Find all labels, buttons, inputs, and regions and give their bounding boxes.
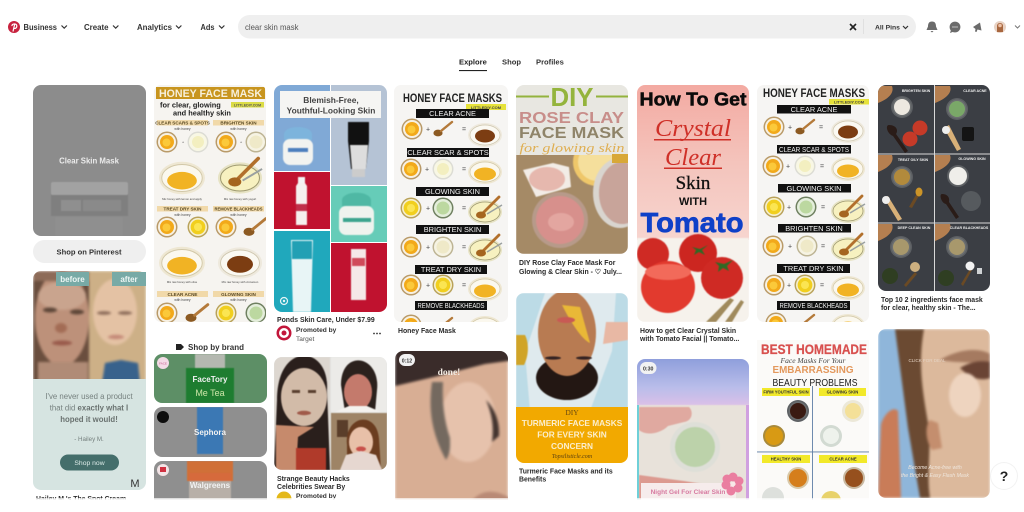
headline: FOR EVERY SKIN [537,430,607,440]
pin title: Ponds Skin Care, Under $7.99 [277,317,375,324]
row: glowing skin: = [462,206,466,212]
headline: CONCERN [551,441,593,451]
video caption: Night Gel For Clear Skin [651,489,725,496]
section: glowing skin: GLOWING SKIN [221,292,257,297]
product image [154,461,267,500]
pin title: Clear Skin Mask [59,156,120,166]
icon: chat [950,22,960,33]
section: treat dry skin [156,206,208,284]
panel: DIY rose clay mask [516,85,628,276]
section: clear scars: + [182,140,185,144]
video duration badge [399,354,415,366]
slate: treat oily skin [882,158,929,221]
pin title: with Tomato Facial || Tomato... [639,336,739,343]
row: remove blackheads [401,301,500,322]
row: clear acne: + [788,124,792,132]
video duration badge: 0:30 [643,366,654,372]
headline: DIY [516,88,628,106]
icon: flower [722,472,744,496]
row: glowing skin: + [426,206,430,212]
panel: honey face mask chart [154,85,266,324]
label: after: after [120,275,138,284]
section: treat dry skin: with honey [174,213,191,217]
pin image: mask jar [33,85,146,236]
row: remove blackheads: REMOVE BLACKHEADS [780,301,848,310]
promoted by: Promoted by [296,327,337,334]
ad caption: the Bright & Easy Flash Mask [901,473,969,479]
pin title: Strange Beauty Hacks [277,476,350,483]
site tag: LITTLEDIY.COM [834,100,865,104]
row: treat dry skin: TREAT DRY SKIN [421,265,481,274]
headline: rose clay: ROSE CLAY [519,110,624,127]
nav: Create: Create [84,23,109,32]
panel: best homemade masks [757,340,870,512]
ad headline: Youthful-Looking Skin [287,106,375,116]
panel: before and after ad [33,270,146,503]
headline: crystal: Crystal [655,116,731,142]
row: brighten skin: BRIGHTEN SKIN [785,224,843,233]
slate: treat oily skin: TREAT OILY SKIN [898,158,929,162]
video caption: done! [438,368,460,378]
video duration badge [640,362,656,374]
portrait photo [878,329,990,498]
label: after [112,272,146,286]
section: glowing skin: with honey [230,298,247,302]
row: treat dry skin: + [787,282,791,290]
pin title [639,328,739,343]
row: clear acne: CLEAR ACNE [429,109,476,118]
button: shop on pinterest [33,240,146,263]
row: glowing skin: GLOWING SKIN [786,184,842,193]
panel: honey face masks sheet one [394,85,508,340]
site tag: LITTLEDIY.COM [471,105,502,110]
slate grid [878,85,990,291]
row: brighten skin [762,224,865,261]
slate: glowing skin [941,157,986,219]
button: shop now [60,454,119,470]
icon: avatar [994,21,1006,33]
help button: ? [1000,468,1008,484]
icon: megaphone [973,22,982,32]
tabs [459,58,564,71]
help button [990,462,1018,490]
panel: turmeric face masks [516,290,628,484]
slate: clear acne: CLEAR ACNE [963,89,987,93]
sheet title: HONEY FACE MASK [159,88,262,100]
row: treat dry skin: TREAT DRY SKIN [783,264,844,273]
headline: Topsilisticle.com [552,454,593,460]
label: before: before [60,275,85,284]
row: clear acne [764,105,865,143]
slate: glowing skin: GLOWING SKIN [958,157,986,161]
button: shop now: Shop now [74,460,105,467]
pin title [519,468,613,484]
tag: glowing skin: GLOWING SKIN [827,390,858,395]
celebrity collage [274,356,387,470]
promoted by: Target [296,336,314,343]
headline: clear: Clear [665,145,722,171]
row: brighten skin: + [426,244,430,252]
section: treat dry skin: TREAT DRY SKIN [164,206,202,212]
section: brighten [213,120,266,201]
row: brighten skin [400,225,502,262]
section: brighten: Mix raw honey with yogurt [224,197,256,201]
icon: target logo [276,326,292,340]
section: remove blackheads [213,206,266,284]
row: remove blackheads [766,301,865,338]
row: brighten skin: = [821,244,825,250]
row: treat dry skin: = [820,282,824,290]
tag: clear acne [819,455,867,511]
pin title: Benefits [519,476,546,484]
headline: tomato: Tomato [640,207,744,238]
section: clear scars: with honey [174,127,191,131]
testimonial quote: that did exactly what I [50,404,128,412]
slate: brighten skin: BRIGHTEN SKIN [902,89,931,93]
poster [757,340,870,512]
row: clear scar and spots [400,148,502,184]
brand logo M: M [130,478,140,490]
panel: crystal clear skin with tomato [637,85,749,343]
icon: pinterest logo [8,21,20,33]
nav: Ads: Ads [200,23,215,32]
headline: face mask: FACE MASK [519,125,624,142]
row: clear scar and spots: + [786,164,790,170]
brand name: Sephora [194,428,227,437]
tab: Shop: Shop [502,58,521,66]
icon: account chevron [1015,26,1020,28]
pin title [881,297,983,312]
pin title: Turmeric Face Masks and its [519,468,613,476]
section: clear scars [155,120,210,201]
poster headline: BEAUTY PROBLEMS [772,378,858,389]
row: clear scar and spots: = [820,164,824,170]
row: glowing skin: GLOWING SKIN [425,187,480,196]
panel: clear skin mask shop card [33,85,146,263]
testimonial quote: I've never used a product [45,392,133,401]
row: glowing skin: + [787,204,791,212]
poster headline: EMBARRASSING [772,365,854,376]
icon: bell [926,22,938,32]
bottom fade [0,498,1000,512]
site tag [829,99,869,104]
video frame [395,351,508,500]
promoted by: Promoted by [296,493,337,500]
panel: night gel video [637,359,749,512]
slate: clear blackheads [938,226,989,286]
grid lines [757,386,870,512]
product image: Me Tea [195,388,225,398]
chart title: HONEY FACE MASKS [763,88,865,100]
row: clear scar and spots: = [462,166,466,174]
testimonial quote: hoped it would! [60,415,118,424]
button: shop on pinterest: Shop on Pinterest [57,248,122,256]
brand logo [157,464,169,476]
top navigation bar [8,15,1020,38]
panel: top ingredients slate chart [878,85,990,312]
section: clear scars: CLEAR SCARS & SPOTS [155,120,210,126]
section: clear scars: Mix honey with lemon and apply [162,197,202,201]
section: remove blackheads: REMOVE BLACKHEADS [214,206,262,212]
tag: clear acne: CLEAR ACNE [829,457,857,462]
panel: acne-free flash mask ad [878,329,990,498]
site tag: LITTLEDIY.COM [234,103,261,107]
headline [522,408,623,460]
pin image [516,85,628,254]
tag: glowing skin [819,388,866,447]
row: treat dry skin [764,264,865,300]
section: remove blackheads: with honey [230,213,247,217]
pin title [277,476,350,491]
slate: clear blackheads: CLEAR BLACKHEADS [950,226,989,230]
brand name: FaceTory [193,375,228,384]
headline: for glowing skin: for glowing skin [520,140,624,155]
brand logo [157,411,169,423]
row: clear scar and spots [762,145,865,181]
panel: eyebrow video [395,351,508,500]
faint label: CLICK FOR DEAL [908,358,946,363]
ad headline [280,91,381,118]
section: clear acne: CLEAR ACNE [168,292,197,297]
slate: deep clean skin: DEEP CLEAN SKIN [898,226,931,230]
product collage [274,85,387,312]
pin title: Hailey M.'s The Spot Cream [36,496,126,503]
nav: Business: Business [24,23,58,32]
section: clear acne [156,291,208,324]
panel: brand Sephora [154,407,267,457]
site tag [231,102,264,108]
tag: healthy skin [762,455,810,509]
headline: skin: Skin [676,173,711,194]
row: clear acne [402,109,502,147]
brand logo: FACE [159,362,167,366]
search bar [238,15,916,38]
honey masks chart [394,85,508,340]
row: treat dry skin: + [426,282,430,290]
ad caption [901,465,969,479]
panel: celebrity beauty hacks [274,356,387,506]
headline: DIY [565,408,579,417]
row: brighten skin: = [462,244,466,252]
tab: Profiles: Profiles [536,58,564,66]
row: clear scar and spots: + [425,166,429,174]
section: remove blackheads: Mix raw honey with cinnamon [222,280,259,284]
slate: brighten skin [887,89,931,153]
row: clear scar and spots: CLEAR SCAR & SPOTS [407,148,489,157]
row: glowing skin [400,187,502,224]
row: treat dry skin [400,265,502,301]
section: brighten: with honey [230,127,247,131]
poster headline: Face Masks For Your [780,356,846,365]
advertiser logo [276,492,292,506]
pin image [637,85,749,322]
tag: healthy skin: HEALTHY SKIN [771,457,801,462]
pin title: for clear, healthy skin - The... [881,305,976,312]
poster headline: BEST HOMEMADE [761,342,867,357]
nav: Analytics: Analytics [137,23,173,32]
row: remove blackheads: REMOVE BLACKHEADS [418,301,485,310]
panel: brand Walgreens [154,461,267,500]
poster headline [761,342,867,389]
sheet subtitle: for clear, glowing [160,100,221,110]
pin title: Top 10 2 ingredients face mask [881,297,983,304]
search bar: All Pins [875,25,900,32]
nav: Ads [200,23,224,32]
row: treat dry skin: = [462,282,466,290]
honey masks chart [757,85,869,338]
row: clear acne: = [819,124,823,132]
more menu [373,333,381,334]
headline: how to get: How To Get [640,90,746,110]
pin title [519,260,622,276]
section: brighten: + [240,140,243,144]
pin title: How to get Clear Crystal Skin [640,328,736,335]
product image [154,407,267,457]
video duration badge: 0:12 [402,358,412,364]
label: before [56,272,89,286]
row: clear acne: CLEAR ACNE [791,105,837,114]
pin image [516,290,628,463]
heading: shop by brand: Shop by brand [188,343,244,352]
chart title: HONEY FACE MASKS [403,93,502,105]
tab: Explore: Explore [459,58,487,66]
pin title: DIY Rose Clay Face Mask For [519,260,616,267]
panel: honey face masks sheet two [757,85,869,338]
honey mask sheet [154,85,266,324]
section: brighten: BRIGHTEN SKIN [220,120,257,126]
tag: firm youthful skin: FIRM YOUTHFUL SKIN [763,390,809,395]
headline: DIY: DIY [550,82,594,112]
row: clear acne: + [426,126,430,134]
testimonial quote: - Hailey M. [74,436,104,443]
row: brighten skin: + [788,244,792,250]
site tag [466,104,506,110]
section: clear acne: with honey [174,298,191,302]
brand name: Walgreens [190,481,231,490]
panel: Ponds skin care ad [274,85,387,343]
row: clear scar and spots: CLEAR SCAR & SPOTS [779,145,849,154]
slate: deep clean skin [882,226,931,287]
pin title: Honey Face Mask [398,328,456,335]
ad headline: Blemish-Free, [303,95,359,105]
sheet subtitle [160,102,230,117]
tag: firm youthful skin [762,388,810,447]
headline: TURMERIC FACE MASKS [522,418,623,428]
row: glowing skin [764,184,865,223]
panel: brand FaceTory [154,354,267,403]
row: glowing skin: = [821,204,825,212]
slate: clear acne [942,89,987,151]
pin title: Glowing & Clear Skin - ♡ July... [519,268,622,276]
pin title: Celebrities Swear By [277,484,345,491]
testimonial quote [45,392,133,443]
promoted by [296,327,337,343]
video frame [637,359,749,512]
section: treat dry skin: Mix raw honey with olive [167,280,198,284]
search bar: clear skin mask [245,23,299,32]
row: brighten skin: BRIGHTEN SKIN [424,225,481,234]
sheet subtitle: and healthy skin [173,108,231,118]
before and after photo [33,270,146,490]
section: glowing skin [213,291,266,324]
row: clear acne: = [462,126,466,134]
headline: with: WITH [679,196,707,208]
ad caption: Become Acne-free with [908,465,962,471]
